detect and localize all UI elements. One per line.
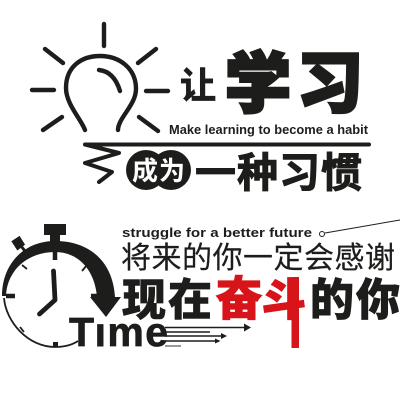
heading: 让学习: 学 <box>225 47 291 121</box>
heading: 现在奋斗的你: 的你 <box>310 276 400 325</box>
divider with zigzag <box>85 144 369 182</box>
label: Time with speed lines: Time <box>69 309 168 355</box>
label: Time with speed lines <box>69 309 251 355</box>
heading: 现在奋斗的你: 斗 <box>262 276 306 325</box>
heading: 现在奋斗的你: 现在 <box>122 276 212 325</box>
badge: 成为 <box>126 150 191 190</box>
heading: 让学习: 习 <box>297 47 363 121</box>
subtitle: struggle for a better future: struggle for a better future <box>122 225 312 240</box>
subtitle: make learning: Make learning to become a habit <box>169 123 369 137</box>
icon: stopwatch <box>2 224 121 347</box>
icon: light bulb with rays <box>32 24 168 131</box>
heading: 现在奋斗的你: 奋 <box>216 273 262 325</box>
pointer line with ring <box>320 220 400 236</box>
heading: 让学习 <box>180 47 363 121</box>
heading: 让学习: 让 <box>180 65 216 106</box>
badge: 成为: 成为 <box>132 156 185 186</box>
heading: 现在奋斗的你 <box>122 273 400 348</box>
heading: 一种习惯: 一种习惯 <box>195 150 362 196</box>
heading: 将来的你一定会感谢: 将来的你一定会感谢 <box>121 242 395 275</box>
